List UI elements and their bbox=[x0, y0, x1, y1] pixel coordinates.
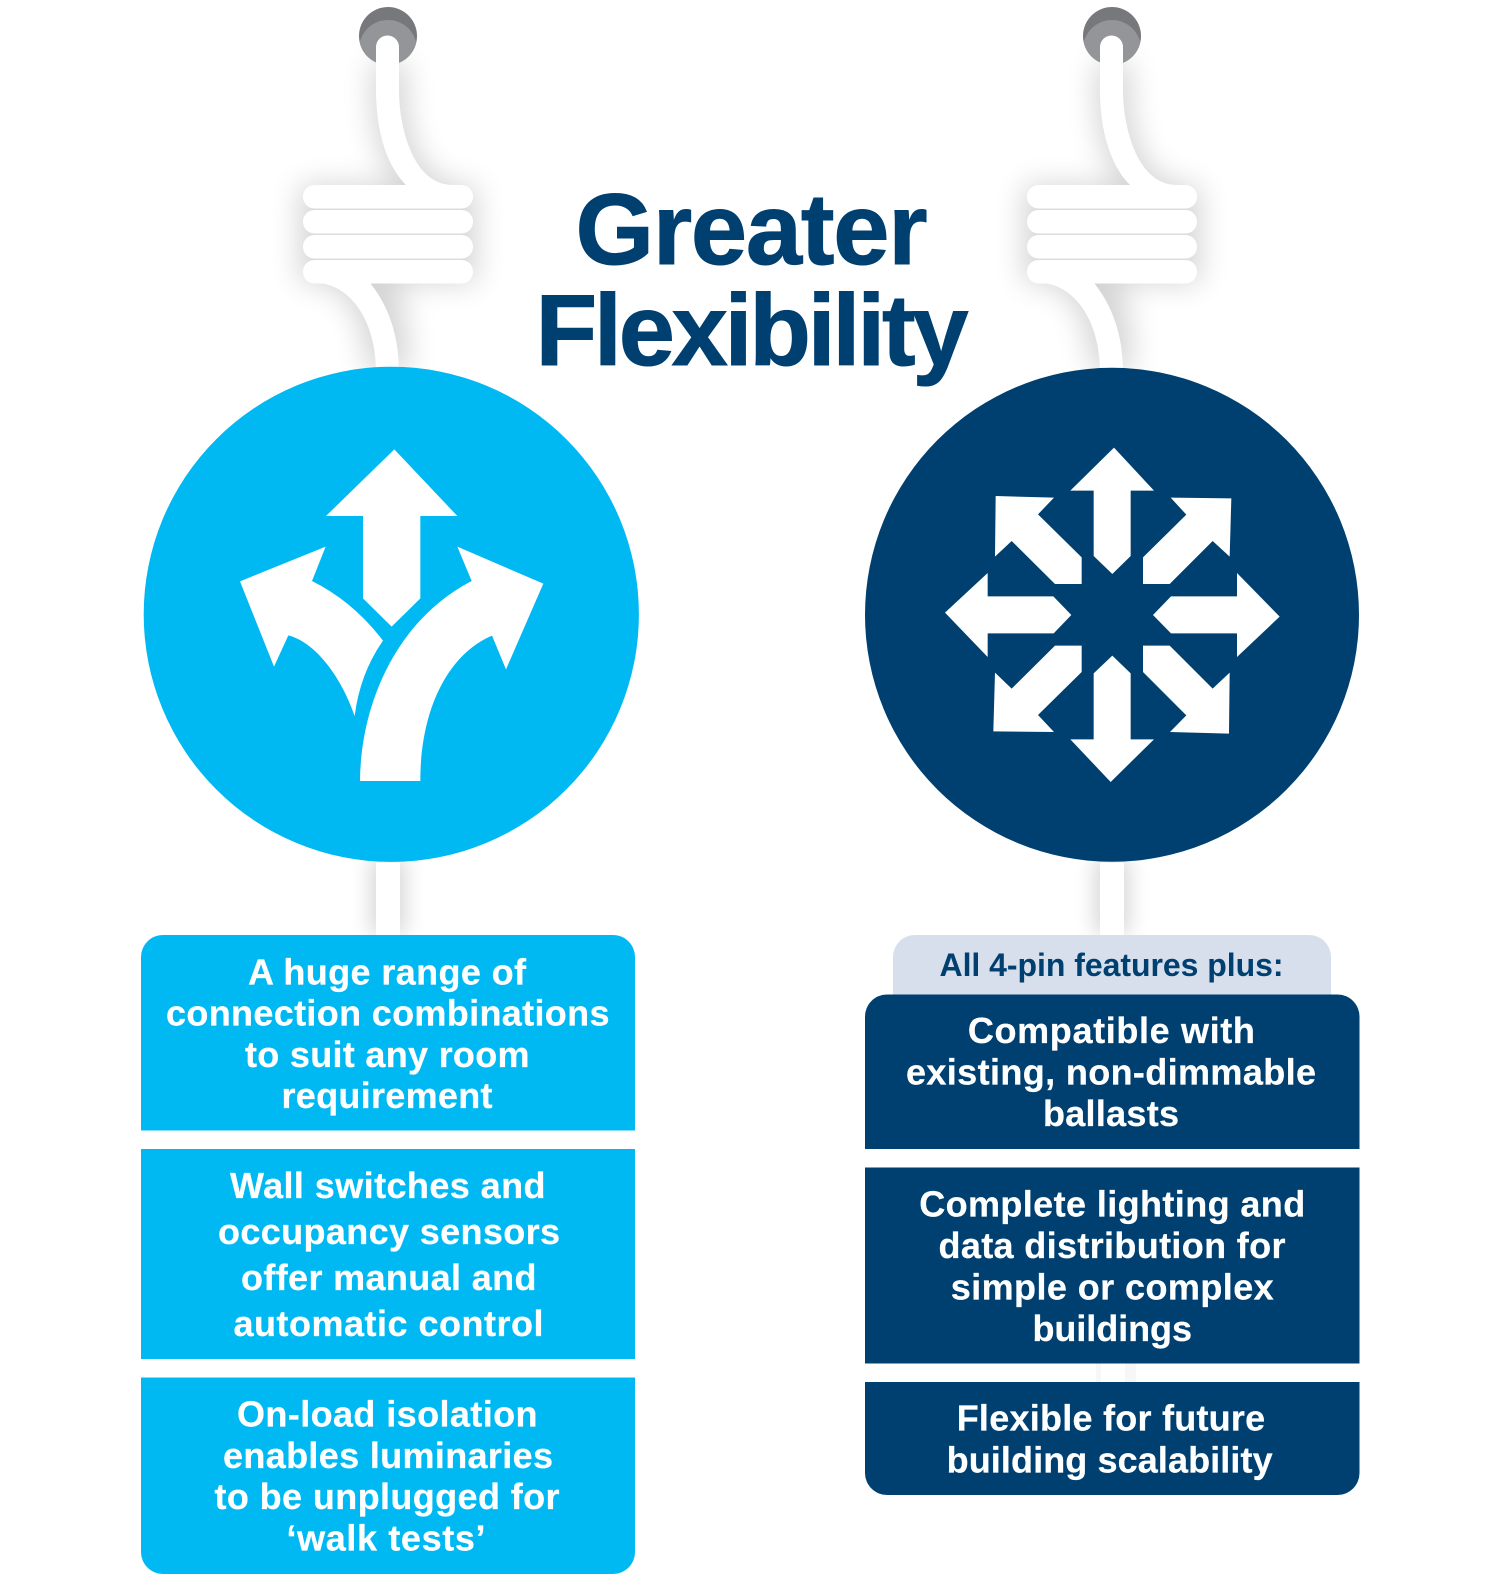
right panel: compatible ballasts: ballasts bbox=[1043, 1093, 1179, 1134]
right tab label: All 4-pin features plus: bbox=[940, 947, 1284, 983]
left panel: room combinations: A huge range of bbox=[248, 952, 527, 992]
title: Flexibility bbox=[536, 275, 968, 387]
right panel: compatible ballasts bbox=[865, 994, 1360, 1149]
right panel: lighting and data: Complete lighting and bbox=[919, 1184, 1305, 1224]
right tab label bbox=[893, 935, 1331, 1000]
title bbox=[536, 174, 968, 387]
left panel: on-load isolation: to be unplugged for bbox=[214, 1476, 560, 1517]
right panel: compatible ballasts: existing, non-dimmable bbox=[906, 1052, 1316, 1092]
left panel: switches and sensors bbox=[141, 1149, 635, 1359]
left panel: room combinations: requirement bbox=[282, 1075, 492, 1116]
right panel: lighting and data: buildings bbox=[1032, 1308, 1192, 1349]
left panel: room combinations bbox=[141, 935, 635, 1130]
left panel: on-load isolation: enables luminaries bbox=[223, 1435, 553, 1476]
right circle with eight-way arrows icon bbox=[865, 368, 1359, 862]
left circle with three-way arrows icon bbox=[144, 367, 639, 862]
right panel: lighting and data: data distribution for bbox=[938, 1225, 1286, 1266]
right panel: future scalability bbox=[865, 1382, 1360, 1495]
left panel: switches and sensors: Wall switches and bbox=[230, 1165, 546, 1206]
left panel: room combinations: connection combinations bbox=[166, 992, 610, 1034]
right panel: future scalability: building scalability bbox=[947, 1440, 1273, 1480]
right panel: future scalability: Flexible for future bbox=[957, 1398, 1265, 1438]
left panel: on-load isolation: On-load isolation bbox=[237, 1394, 538, 1434]
wall socket right bbox=[1083, 7, 1141, 63]
left panel: room combinations: to suit any room bbox=[245, 1034, 530, 1075]
cable stub under left circle bbox=[376, 862, 400, 936]
left panel: on-load isolation: ‘walk tests’ bbox=[286, 1518, 486, 1558]
left panel: switches and sensors: offer manual and bbox=[241, 1257, 536, 1298]
cable between right panels bbox=[1096, 1364, 1136, 1382]
title: Greater bbox=[576, 174, 928, 286]
wall socket left bbox=[359, 7, 417, 63]
right panel: compatible ballasts: Compatible with bbox=[968, 1010, 1255, 1051]
left panel: switches and sensors: occupancy sensors bbox=[218, 1211, 560, 1252]
left panel: on-load isolation bbox=[141, 1378, 635, 1574]
left cable with knot bbox=[300, 5, 476, 934]
icon: eight radiating arrows bbox=[945, 448, 1280, 782]
cable stub under right circle bbox=[1100, 862, 1124, 936]
right panel: lighting and data: simple or complex bbox=[951, 1266, 1274, 1308]
right cable with knot bbox=[1024, 5, 1200, 934]
icon: three diverging arrows bbox=[240, 449, 543, 781]
left panel: switches and sensors: automatic control bbox=[234, 1303, 544, 1344]
right panel: lighting and data bbox=[865, 1168, 1360, 1364]
